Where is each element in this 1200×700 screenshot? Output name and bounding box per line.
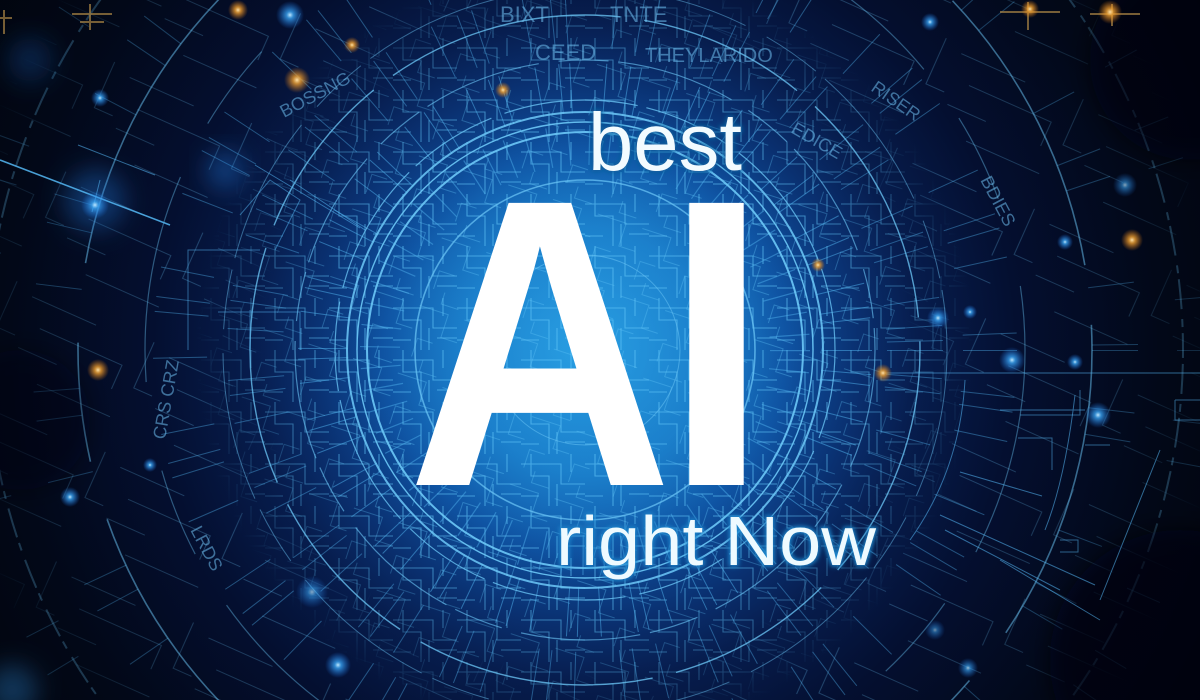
title word: best: best xyxy=(588,97,742,188)
orange light points xyxy=(87,0,1143,382)
circuit glyph labels: BIXT xyxy=(500,2,549,27)
central glow xyxy=(345,105,825,585)
circuit glyph labels: BDIES xyxy=(976,172,1019,230)
title word: right Now: right Now xyxy=(556,502,876,580)
inner circuit grid xyxy=(190,0,980,700)
circuit glyph labels: LRDS xyxy=(186,522,227,574)
circuit glyph labels: TNTE xyxy=(610,2,667,27)
circuit glyph labels: CEED xyxy=(535,40,596,65)
title word: best: best xyxy=(588,97,742,188)
title word: AI: I xyxy=(664,114,769,572)
circuit glyph labels: BOSSNG xyxy=(276,68,354,122)
circuit glyph labels: CRS CRZ xyxy=(149,358,183,441)
gold circuit details xyxy=(0,2,1140,34)
title word: AI: A xyxy=(407,114,673,572)
circuit glyph labels: THEYLARIDO xyxy=(645,45,773,67)
title word: right Now: right Now xyxy=(556,502,876,580)
circuit glyph labels: RISER xyxy=(868,77,924,125)
circuit glyph labels xyxy=(149,2,1019,574)
long glowing traces xyxy=(0,145,1200,620)
circuit glyph labels: EDICE xyxy=(788,118,846,163)
